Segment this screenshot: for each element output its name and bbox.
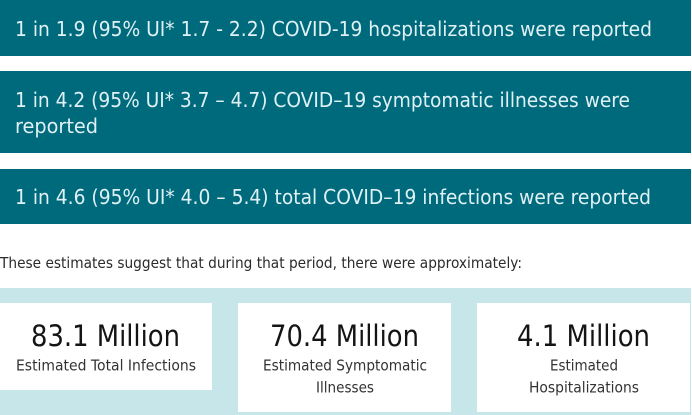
card: hospitalizations (477, 303, 690, 412)
card: symptomatic illnesses (238, 303, 451, 412)
card: symptomatic illnesses: Illnesses (316, 378, 374, 396)
card: total infections: Estimated Total Infections (16, 356, 196, 374)
card: symptomatic illnesses: 70.4 Million (270, 319, 419, 353)
banner: hospitalizations: 1 in 1.9 (95% UI* 1.7 - 2.2) COVID-19 hospitalizations were reported (15, 17, 652, 41)
banner: hospitalizations (0, 0, 691, 56)
card: hospitalizations: Hospitalizations (529, 378, 639, 396)
card: hospitalizations: 4.1 Million (517, 319, 650, 353)
banner: symptomatic illnesses: 1 in 4.2 (95% UI* 3.7 – 4.7) COVID–19 symptomatic illnesses were (15, 88, 630, 112)
card: hospitalizations: Estimated (550, 356, 618, 374)
intro sentence: These estimates suggest that during that period, there were approximately: (0, 254, 522, 272)
panel: estimates (0, 288, 691, 415)
banner: total infections: 1 in 4.6 (95% UI* 4.0 – 5.4) total COVID–19 infections were reported (15, 185, 651, 209)
card: symptomatic illnesses: Estimated Symptomatic (263, 356, 427, 374)
banner: total infections (0, 169, 691, 224)
card: total infections (0, 303, 212, 390)
banner: symptomatic illnesses (0, 71, 691, 153)
banner: symptomatic illnesses: reported (15, 114, 98, 138)
card: total infections: 83.1 Million (31, 319, 180, 353)
